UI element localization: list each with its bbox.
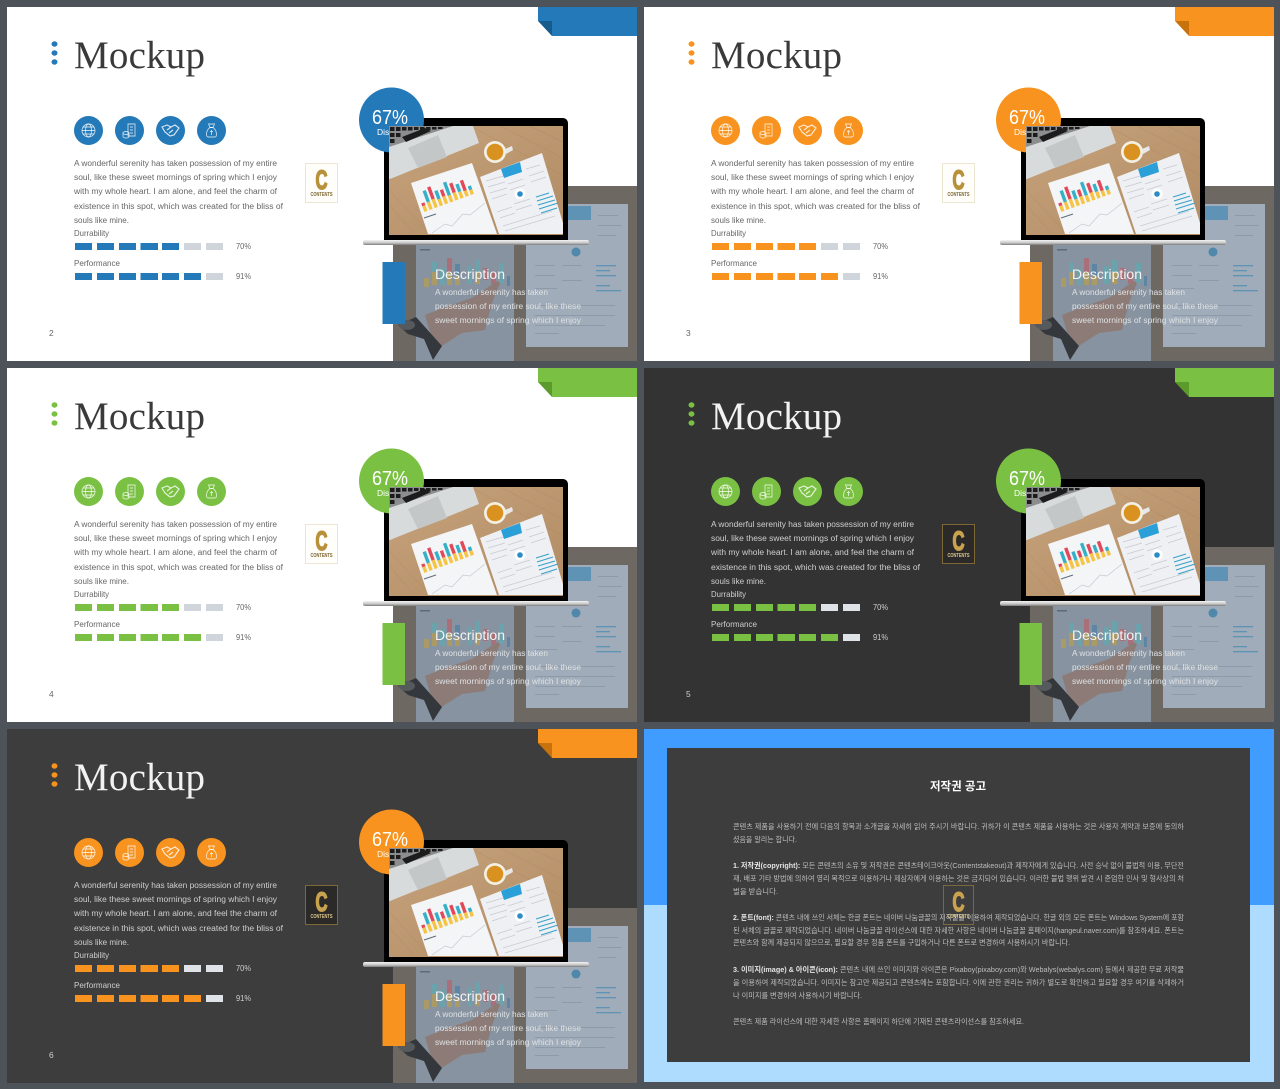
performance meter: 91% bbox=[873, 271, 888, 281]
body text bbox=[710, 520, 921, 586]
performance meter: 91% bbox=[873, 632, 888, 642]
icon: handshake bbox=[793, 116, 822, 145]
discount circle bbox=[996, 448, 1061, 514]
description bbox=[435, 266, 582, 325]
laptop screen photo bbox=[389, 848, 563, 957]
description: Description bbox=[435, 988, 505, 1004]
description: A wonderful serenity has taken bbox=[435, 649, 548, 658]
discount circle: 67% bbox=[1009, 468, 1045, 490]
description: A wonderful serenity has taken bbox=[435, 1010, 548, 1019]
performance meter: Performance bbox=[711, 619, 757, 629]
accent block bbox=[1020, 262, 1042, 324]
performance meter: Performance bbox=[711, 258, 757, 268]
performance meter bbox=[74, 619, 251, 642]
description bbox=[1072, 266, 1219, 325]
notice: image and icon bbox=[733, 964, 1184, 1000]
logo: CONTENTS bbox=[310, 553, 333, 559]
durability meter: 70% bbox=[236, 241, 251, 251]
accent block bbox=[382, 984, 405, 1046]
performance meter bbox=[74, 980, 251, 1003]
durability meter: 70% bbox=[873, 241, 888, 251]
body text: existence in this spot, which was created for the bliss of bbox=[711, 202, 921, 211]
description: possession of my entire soul, like these bbox=[435, 663, 582, 672]
logo bbox=[942, 524, 974, 564]
body text: A wonderful serenity has taken possession of my entire bbox=[711, 159, 915, 168]
logo: CONTENTS bbox=[948, 192, 970, 198]
description: Description bbox=[435, 627, 505, 643]
icon: money bag bbox=[834, 477, 863, 506]
ribbon bbox=[538, 7, 637, 36]
notice intro: 셨음을 알리는 합니다. bbox=[733, 834, 797, 844]
description: possession of my entire soul, like these bbox=[435, 1024, 582, 1033]
body text: souls like mine. bbox=[711, 577, 766, 586]
icon: handshake bbox=[156, 477, 185, 506]
logo bbox=[306, 886, 338, 924]
icon: globe bbox=[74, 838, 103, 867]
icon: money bag bbox=[834, 116, 863, 145]
icon: coins and document bbox=[115, 477, 144, 506]
body text: with my whole heart. I am alone, and feel the charm of bbox=[710, 187, 915, 196]
notice heading: 저작권 공고 bbox=[930, 779, 986, 793]
performance meter bbox=[711, 619, 888, 642]
durability meter bbox=[711, 228, 888, 251]
panel: slide 4 green on white bbox=[7, 368, 637, 722]
performance meter: Performance bbox=[74, 980, 120, 990]
icon: globe bbox=[711, 116, 740, 145]
page number: 5 bbox=[686, 689, 691, 699]
icon: money bag bbox=[197, 477, 226, 506]
accent block bbox=[382, 623, 405, 685]
body text bbox=[710, 159, 921, 225]
background photo bbox=[393, 547, 637, 722]
title: Mockup bbox=[74, 34, 205, 77]
accent block bbox=[1020, 623, 1042, 685]
description: Description bbox=[1072, 266, 1142, 282]
durability meter bbox=[711, 589, 888, 612]
description: sweet mornings of spring which I enjoy bbox=[435, 677, 581, 686]
logo watermark bbox=[944, 886, 974, 924]
title dots bbox=[688, 402, 694, 426]
performance meter: Performance bbox=[74, 258, 120, 268]
discount circle: 67% bbox=[372, 829, 408, 851]
ribbon bbox=[538, 729, 637, 758]
body text: A wonderful serenity has taken possession of my entire bbox=[74, 159, 278, 168]
notice: copyright: 재, 배포 기타 방법에 의하여 영리 목적으로 이용하거나 제삼자에게 이용하는 것은 금지되어 있습니다. 이러한 불법 행위 발견 시 준엄한 민사 및 형사상의 처 bbox=[733, 873, 1184, 883]
description: sweet mornings of spring which I enjoy bbox=[1072, 677, 1218, 686]
laptop screen photo bbox=[389, 126, 563, 235]
notice: font: 된 서체의 글꼴로 제작되었습니다. 네이버 나눔글꼴 라이선스에 대한 자세한 사항은 네이버 나눔글꼴 홈페이지(hangeul.naver.com)를 참조하세요. 폰트는 bbox=[733, 925, 1184, 935]
body text bbox=[73, 881, 284, 947]
logo: C bbox=[316, 526, 328, 556]
icon: coins and document bbox=[752, 116, 781, 145]
title: Mockup bbox=[711, 395, 842, 438]
body text: existence in this spot, which was created for the bliss of bbox=[711, 563, 921, 572]
notice: image and icon: 3. 이미지(image) & 아이콘(icon): 콘텐츠 내에 쓰인 이미지와 아이콘은 Pixaboy(pixaboy.com)와 Webalys(webalys.com) 등에서 제공한 무료 저작물 bbox=[733, 964, 1184, 974]
logo: CONTENTS bbox=[310, 192, 333, 198]
body text: souls like mine. bbox=[711, 216, 766, 225]
performance meter: 91% bbox=[236, 632, 251, 642]
discount circle bbox=[996, 88, 1061, 152]
discount circle: 67% bbox=[372, 468, 408, 490]
page number: 2 bbox=[49, 328, 54, 338]
description: sweet mornings of spring which I enjoy bbox=[1072, 316, 1218, 325]
notice intro: 콘텐츠 제품을 사용하기 전에 다음의 항목과 소개글을 자세히 읽어 주시기 바랍니다. 귀하가 이 콘텐츠 제품을 사용하는 것은 사용자 계약과 보증에 동의하 bbox=[733, 821, 1184, 831]
durability meter bbox=[74, 589, 251, 612]
body text: existence in this spot, which was created for the bliss of bbox=[74, 202, 284, 211]
notice: image and icon: 을 이용하여 제작되었습니다. 이미지는 참고만 제공되고 콘텐츠에는 포함합니다. 이에 관한 권리는 귀하가 별도로 확인하고 필요할 경우 여기를 삭제하거 bbox=[733, 977, 1184, 987]
description: A wonderful serenity has taken bbox=[1072, 288, 1185, 297]
title: Mockup bbox=[74, 756, 205, 799]
logo watermark: CONTENTS bbox=[948, 914, 970, 920]
icon: coins and document bbox=[115, 838, 144, 867]
durability meter: 70% bbox=[236, 963, 251, 973]
notice: image and icon: 나 이미지를 변경하여 사용하시기 바랍니다. bbox=[733, 990, 862, 1000]
durability meter: 70% bbox=[236, 602, 251, 612]
discount circle bbox=[359, 88, 424, 152]
body text: soul, like these sweet mornings of spring which I enjoy bbox=[74, 895, 277, 904]
body text: with my whole heart. I am alone, and feel the charm of bbox=[73, 909, 278, 918]
title dots bbox=[52, 763, 58, 787]
title dots bbox=[688, 41, 694, 65]
description: sweet mornings of spring which I enjoy bbox=[435, 1038, 581, 1047]
laptop frame bbox=[1000, 479, 1226, 606]
title dots bbox=[52, 41, 58, 65]
logo bbox=[306, 524, 338, 564]
discount circle: 67% bbox=[372, 107, 408, 129]
logo: C bbox=[952, 165, 964, 195]
body text: souls like mine. bbox=[74, 216, 129, 225]
icon: coins and document bbox=[115, 116, 144, 145]
icon: coins and document bbox=[752, 477, 781, 506]
description: possession of my entire soul, like these bbox=[1072, 663, 1219, 672]
body text: with my whole heart. I am alone, and feel the charm of bbox=[73, 548, 278, 557]
icon: globe bbox=[74, 477, 103, 506]
notice: copyright: 벌을 받습니다. bbox=[733, 886, 778, 896]
body text: soul, like these sweet mornings of spring which I enjoy bbox=[74, 534, 277, 543]
panel: copyright notice bbox=[644, 729, 1274, 1082]
discount circle: Discount bbox=[1014, 488, 1048, 498]
background photo bbox=[1030, 547, 1274, 722]
title: Mockup bbox=[74, 395, 205, 438]
icon: handshake bbox=[156, 116, 185, 145]
durability meter: Durrability bbox=[711, 589, 747, 599]
body text: soul, like these sweet mornings of spring which I enjoy bbox=[74, 173, 277, 182]
durability meter: Durrability bbox=[74, 950, 110, 960]
description: Description bbox=[1072, 627, 1142, 643]
laptop screen photo bbox=[389, 487, 563, 596]
notice: license: 콘텐츠 제품 라이선스에 대한 자세한 사항은 홈페이지 하단에 기재된 콘텐츠라이선스를 참조하세요. bbox=[733, 1016, 1024, 1026]
logo bbox=[306, 164, 338, 202]
discount circle: Discount bbox=[377, 127, 411, 137]
panel: slide 6 orange on dark bbox=[7, 729, 637, 1083]
notice: font: 2. 폰트(font): 콘텐츠 내에 쓰인 서체는 한글 폰트는 네이버 나눔글꼴의 저작물을 이용하여 제작되었습니다. 한글 외의 모든 폰트는 Windows System에 포함 bbox=[733, 912, 1184, 922]
body text: souls like mine. bbox=[74, 938, 129, 947]
durability meter bbox=[74, 950, 251, 973]
durability meter: Durrability bbox=[711, 228, 747, 238]
notice: copyright bbox=[733, 860, 1184, 896]
logo: C bbox=[316, 165, 328, 195]
logo: CONTENTS bbox=[948, 553, 970, 559]
discount circle: Discount bbox=[377, 849, 411, 859]
description bbox=[1072, 627, 1219, 686]
title: Mockup bbox=[711, 34, 842, 77]
background photo bbox=[1030, 186, 1274, 361]
body text: souls like mine. bbox=[74, 577, 129, 586]
ribbon bbox=[1175, 7, 1274, 36]
body text: existence in this spot, which was created for the bliss of bbox=[74, 563, 284, 572]
description bbox=[435, 988, 582, 1047]
icon: handshake bbox=[156, 838, 185, 867]
logo watermark: C bbox=[952, 887, 964, 917]
notice: copyright: 1. 저작권(copyright): 모든 콘텐츠의 소유 및 저작권은 콘텐츠테이크아웃(Contentstakeout)과 제작자에게 있습니다. 사전 승낙 없이 불법적 이용, 무단전 bbox=[733, 860, 1184, 870]
notice intro bbox=[733, 821, 1184, 844]
body text: existence in this spot, which was created for the bliss of bbox=[74, 924, 284, 933]
durability meter: 70% bbox=[873, 602, 888, 612]
page number: 4 bbox=[49, 689, 54, 699]
logo: C bbox=[316, 887, 328, 917]
laptop frame bbox=[363, 840, 589, 967]
body text: soul, like these sweet mornings of spring which I enjoy bbox=[711, 173, 914, 182]
laptop screen photo bbox=[1026, 126, 1200, 235]
laptop frame bbox=[363, 118, 589, 245]
body text bbox=[73, 159, 284, 225]
icon: globe bbox=[711, 477, 740, 506]
discount circle: Discount bbox=[1014, 127, 1048, 137]
background photo bbox=[393, 908, 637, 1083]
performance meter: 91% bbox=[236, 271, 251, 281]
body text: soul, like these sweet mornings of spring which I enjoy bbox=[711, 534, 914, 543]
description: sweet mornings of spring which I enjoy bbox=[435, 316, 581, 325]
page number: 3 bbox=[686, 328, 691, 338]
discount circle: Discount bbox=[377, 488, 411, 498]
ribbon bbox=[538, 368, 637, 397]
background photo bbox=[393, 186, 637, 361]
body text bbox=[73, 520, 284, 586]
discount circle: 67% bbox=[1009, 107, 1045, 129]
body text: with my whole heart. I am alone, and feel the charm of bbox=[73, 187, 278, 196]
icon: money bag bbox=[197, 116, 226, 145]
icon: globe bbox=[74, 116, 103, 145]
discount circle bbox=[359, 810, 424, 874]
notice: font bbox=[733, 912, 1184, 947]
title dots bbox=[52, 402, 58, 426]
logo: CONTENTS bbox=[310, 914, 333, 920]
ribbon bbox=[1175, 368, 1274, 397]
performance meter: 91% bbox=[236, 993, 251, 1003]
laptop screen photo bbox=[1026, 487, 1200, 596]
performance meter: Performance bbox=[74, 619, 120, 629]
laptop frame bbox=[1000, 118, 1226, 245]
body text: A wonderful serenity has taken possession of my entire bbox=[74, 520, 278, 529]
icon: handshake bbox=[793, 477, 822, 506]
icon: money bag bbox=[197, 838, 226, 867]
logo: C bbox=[952, 526, 964, 556]
description: A wonderful serenity has taken bbox=[1072, 649, 1185, 658]
description bbox=[435, 627, 582, 686]
notice: font: 콘텐츠와 함께 제공되지 않으므로, 필요할 경우 정품 폰트를 구입하거나 다른 폰트로 변경하여 사용하시기 바랍니다. bbox=[733, 937, 1070, 947]
body text: A wonderful serenity has taken possession of my entire bbox=[74, 881, 278, 890]
page number: 6 bbox=[49, 1050, 54, 1060]
logo bbox=[942, 164, 974, 202]
panel: slide 2 blue on white bbox=[7, 7, 637, 361]
body text: with my whole heart. I am alone, and feel the charm of bbox=[710, 548, 915, 557]
description: possession of my entire soul, like these bbox=[435, 302, 582, 311]
durability meter: Durrability bbox=[74, 228, 110, 238]
performance meter bbox=[74, 258, 251, 281]
description: possession of my entire soul, like these bbox=[1072, 302, 1219, 311]
accent block bbox=[382, 262, 405, 324]
durability meter bbox=[74, 228, 251, 251]
body text: A wonderful serenity has taken possession of my entire bbox=[711, 520, 915, 529]
description: Description bbox=[435, 266, 505, 282]
panel: slide 3 orange on white bbox=[644, 7, 1274, 361]
description: A wonderful serenity has taken bbox=[435, 288, 548, 297]
durability meter: Durrability bbox=[74, 589, 110, 599]
discount circle bbox=[359, 448, 424, 514]
panel: slide 5 green on dark bbox=[644, 368, 1274, 722]
laptop frame bbox=[363, 479, 589, 606]
performance meter bbox=[711, 258, 888, 281]
